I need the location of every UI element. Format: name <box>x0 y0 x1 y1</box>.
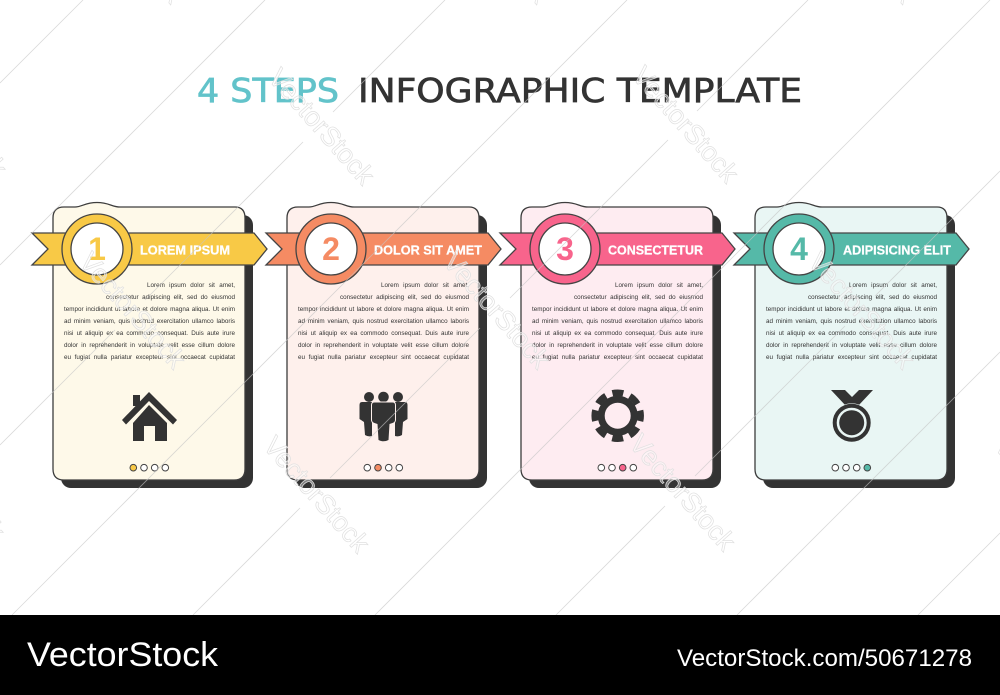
card body <box>755 202 947 480</box>
text block: ad minim veniam, quis nostrud exercitation ullamco laboris <box>64 318 235 325</box>
text block: nisi ut aliquip ex ea commodo consequat. Duis aute irure <box>64 330 235 337</box>
footer bar <box>0 615 1000 695</box>
text block: dolor in reprehenderit in voluptate velit esse cillum dolore <box>532 342 703 349</box>
ribbon label: LOREM IPSUM <box>140 242 230 258</box>
ribbon label: DOLOR SIT AMET <box>374 242 482 258</box>
card shadow <box>763 215 955 488</box>
watermarks: VectorStock <box>257 431 376 559</box>
number badge: 3 <box>556 231 574 267</box>
ribbon <box>32 233 267 265</box>
footer bar: VectorStock <box>27 636 219 674</box>
icon: team of people <box>360 392 408 441</box>
number badge <box>296 214 366 284</box>
text block <box>298 280 469 364</box>
progress dots <box>832 464 871 471</box>
text block: ad minim veniam, quis nostrud exercitation ullamco laboris <box>532 318 703 325</box>
icon: medal <box>831 390 873 442</box>
watermarks: VectorStock <box>73 247 192 375</box>
number badge <box>530 214 600 284</box>
ribbon <box>266 233 501 265</box>
number badge: 4 <box>790 231 808 267</box>
number badge: 1 <box>88 231 106 267</box>
text block: dolor in reprehenderit in voluptate velit esse cillum dolore <box>298 342 469 349</box>
text block: nisi ut aliquip ex ea commodo consequat. Duis aute irure <box>766 330 937 337</box>
number badge: 2 <box>322 231 340 267</box>
text block: ad minim veniam, quis nostrud exercitation ullamco laboris <box>766 318 937 325</box>
text block: tempor incididunt ut labore et dolore magna aliqua. Ut enim <box>532 306 703 313</box>
ribbon <box>734 233 969 265</box>
text block: eu fugiat nulla pariatur excepteur sint occaecat cupidatat <box>766 354 937 361</box>
icon: gear <box>595 393 641 439</box>
text block: nisi ut aliquip ex ea commodo consequat. Duis aute irure <box>298 330 469 337</box>
title: INFOGRAPHIC TEMPLATE <box>358 71 802 110</box>
text block: dolor in reprehenderit in voluptate velit esse cillum dolore <box>766 342 937 349</box>
card shadow <box>529 215 721 488</box>
text block <box>766 280 937 364</box>
text block: ad minim veniam, quis nostrud exercitation ullamco laboris <box>298 318 469 325</box>
panel: step 1 <box>32 202 267 488</box>
text block: nisi ut aliquip ex ea commodo consequat. Duis aute irure <box>532 330 703 337</box>
icon: house <box>122 392 177 441</box>
text block: dolor in reprehenderit in voluptate velit esse cillum dolore <box>64 342 235 349</box>
number badge <box>62 214 132 284</box>
ribbon <box>500 233 735 265</box>
text block: eu fugiat nulla pariatur excepteur sint occaecat cupidatat <box>298 354 469 361</box>
text block: eu fugiat nulla pariatur excepteur sint occaecat cupidatat <box>532 354 703 361</box>
card body <box>287 202 479 480</box>
watermarks: VectorStock <box>626 61 745 189</box>
text block: tempor incididunt ut labore et dolore magna aliqua. Ut enim <box>298 306 469 313</box>
text block: consectetur adipiscing elit, sed do eiusmod <box>574 294 703 301</box>
ribbon label: ADIPISICING ELIT <box>843 242 951 258</box>
text block: tempor incididunt ut labore et dolore magna aliqua. Ut enim <box>766 306 937 313</box>
footer bar: VectorStock.com/50671278 <box>677 645 972 672</box>
card shadow <box>295 215 487 488</box>
watermarks: VectorStock <box>262 63 381 191</box>
panel: step 2 <box>266 202 501 488</box>
progress dots <box>130 464 169 471</box>
text block: Lorem ipsum dolor sit amet, <box>849 282 937 289</box>
panel: step 3 <box>500 202 735 488</box>
title <box>197 71 802 110</box>
card body <box>53 202 245 480</box>
progress dots <box>598 464 637 471</box>
ribbon label: CONSECTETUR <box>608 242 704 258</box>
text block: consectetur adipiscing elit, sed do eiusmod <box>106 294 235 301</box>
text block <box>64 280 235 364</box>
watermarks: VectorStock <box>802 247 921 375</box>
text block: Lorem ipsum dolor sit amet, <box>147 282 235 289</box>
watermarks: VectorStock <box>623 429 742 557</box>
card shadow <box>61 215 253 488</box>
card body <box>521 202 713 480</box>
text block: consectetur adipiscing elit, sed do eiusmod <box>340 294 469 301</box>
panel: step 4 <box>734 202 969 488</box>
watermarks: VectorStock <box>437 247 556 375</box>
text block: tempor incididunt ut labore et dolore magna aliqua. Ut enim <box>64 306 235 313</box>
text block: Lorem ipsum dolor sit amet, <box>381 282 469 289</box>
text block <box>532 280 703 364</box>
number badge <box>764 214 834 284</box>
title: 4 STEPS <box>197 71 339 110</box>
text block: eu fugiat nulla pariatur excepteur sint occaecat cupidatat <box>64 354 235 361</box>
text block: Lorem ipsum dolor sit amet, <box>615 282 703 289</box>
text block: consectetur adipiscing elit, sed do eiusmod <box>808 294 937 301</box>
progress dots <box>364 464 403 471</box>
